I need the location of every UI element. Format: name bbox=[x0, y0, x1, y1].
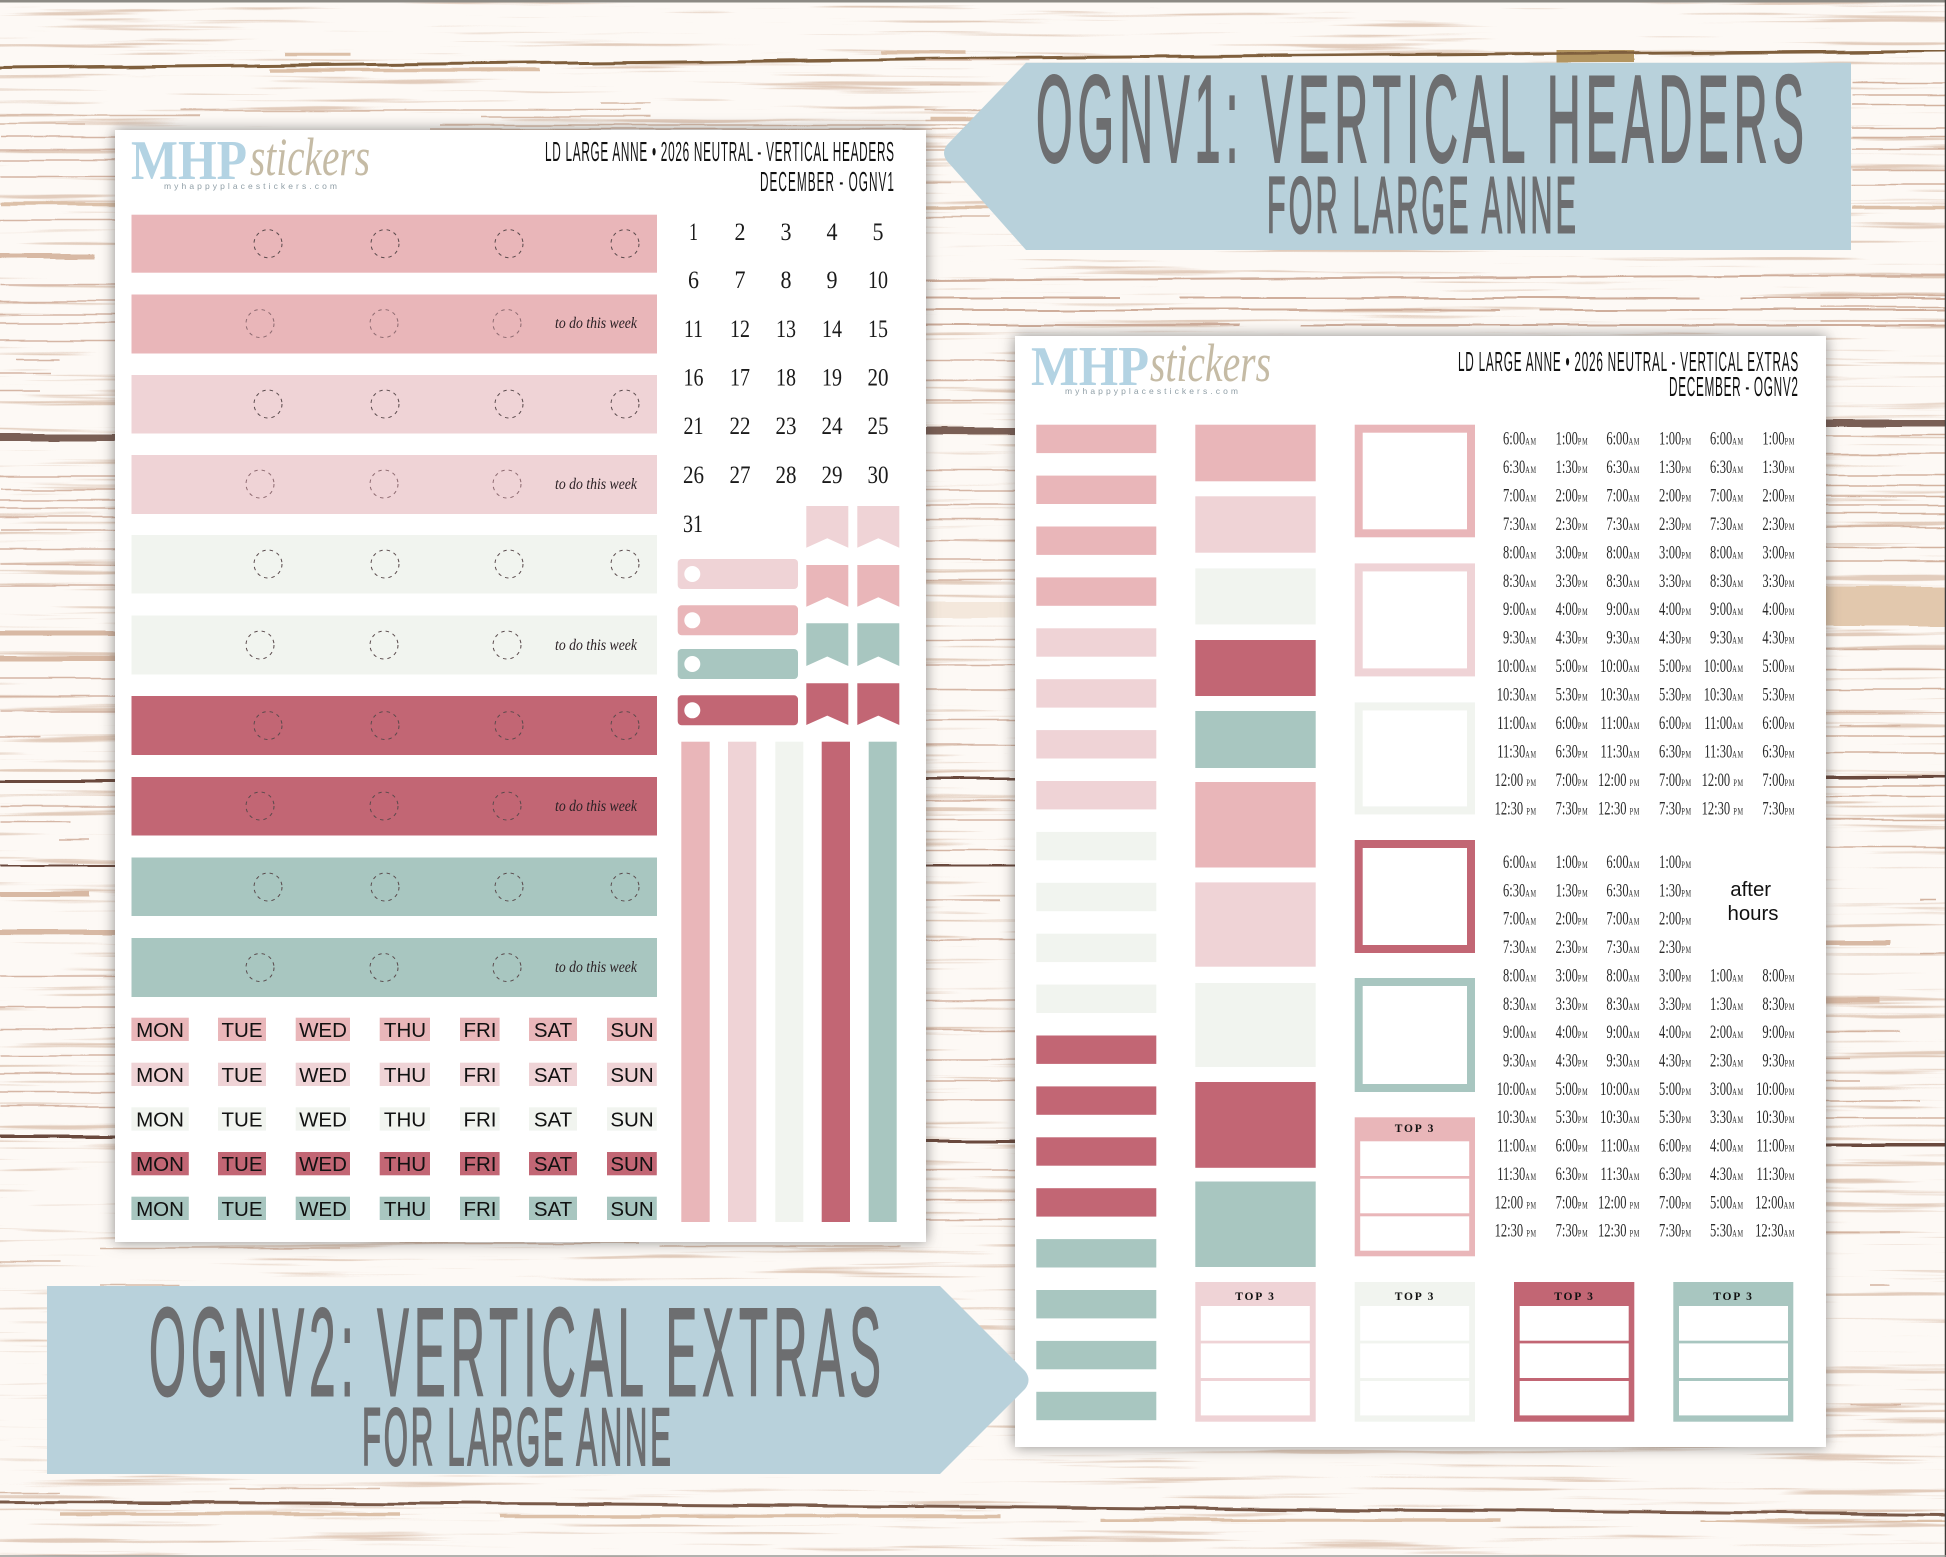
time labels: lower block: 7:30AM bbox=[1503, 938, 1537, 958]
time labels: upper block: 7:30PM bbox=[1556, 799, 1588, 819]
weekly header bars: to do this week bbox=[555, 959, 638, 976]
sheet title bbox=[1458, 346, 1798, 403]
date numbers: 31 bbox=[683, 511, 703, 538]
time labels: lower block: 6:30AM bbox=[1606, 881, 1640, 901]
time labels: lower block: 3:30PM bbox=[1556, 994, 1588, 1015]
time labels: upper block: 6:30PM bbox=[1556, 742, 1588, 762]
time labels: upper block: 5:30PM bbox=[1556, 685, 1588, 705]
time labels: lower block: 4:30PM bbox=[1659, 1051, 1692, 1071]
weekday labels: MON bbox=[136, 1153, 184, 1176]
time labels: lower block: 6:30PM bbox=[1556, 1165, 1588, 1185]
time labels: lower block: 10:00AM bbox=[1497, 1080, 1537, 1100]
time labels: upper block: 3:00PM bbox=[1556, 543, 1588, 563]
time labels: upper block: 1:30PM bbox=[1762, 458, 1795, 478]
weekday labels: THU bbox=[384, 1153, 426, 1176]
bookmark flags bbox=[806, 506, 899, 725]
date numbers: 25 bbox=[868, 413, 888, 440]
weekday labels: TUE bbox=[222, 1198, 262, 1221]
time labels: lower block: 4:00PM bbox=[1659, 1023, 1692, 1043]
time labels: upper block: 5:00PM bbox=[1556, 657, 1588, 677]
sheet title bbox=[545, 136, 894, 198]
sheet title: DECEMBER - OGNV1 bbox=[760, 166, 894, 198]
time labels: lower block: 10:30AM bbox=[1497, 1108, 1537, 1128]
date numbers: 6 bbox=[688, 267, 699, 294]
time labels: lower block: 9:30PM bbox=[1762, 1051, 1795, 1071]
time labels: upper block: 12:30 PM bbox=[1495, 799, 1537, 819]
time labels: upper block: 11:30AM bbox=[1601, 742, 1640, 762]
weekday labels: SUN bbox=[610, 1064, 654, 1087]
time labels: lower block: 11:00AM bbox=[1497, 1136, 1537, 1156]
arrow banner: OGNV1 bbox=[944, 50, 1851, 250]
time labels: upper block: 4:00PM bbox=[1659, 600, 1692, 620]
weekday labels: MON bbox=[136, 1019, 184, 1042]
time labels: upper block: 3:30PM bbox=[1659, 571, 1692, 592]
weekday labels: TUE bbox=[222, 1108, 262, 1132]
date numbers: 8 bbox=[780, 267, 792, 294]
time labels: upper block: 3:30PM bbox=[1762, 571, 1795, 592]
time labels: upper block: 10:00AM bbox=[1497, 657, 1537, 677]
weekly header bars: to do this week bbox=[555, 637, 638, 654]
after hours label bbox=[1727, 879, 1779, 925]
time labels: upper block: 6:30AM bbox=[1503, 458, 1537, 478]
time labels: lower block: 11:30AM bbox=[1601, 1165, 1640, 1185]
time labels: upper block: 9:30AM bbox=[1503, 628, 1537, 648]
time labels: lower block: 10:30AM bbox=[1600, 1108, 1640, 1128]
time labels: lower block: 5:30AM bbox=[1710, 1221, 1744, 1241]
weekday labels: THU bbox=[384, 1198, 426, 1221]
time labels: upper block: 9:30AM bbox=[1606, 628, 1640, 648]
time labels: upper block: 10:30AM bbox=[1600, 685, 1640, 705]
weekly header bars: to do this week bbox=[555, 315, 638, 332]
time labels: upper block: 2:00PM bbox=[1762, 486, 1795, 506]
time labels: upper block: 1:00PM bbox=[1659, 429, 1692, 449]
time labels: lower block: 9:00AM bbox=[1503, 1023, 1537, 1043]
date numbers: 26 bbox=[683, 462, 704, 489]
small horizontal bars bbox=[1036, 425, 1156, 1420]
sheet 2: vertical extras bbox=[1015, 333, 1826, 1447]
weekday labels: SUN bbox=[610, 1019, 654, 1042]
sheet 1: vertical headers bbox=[115, 127, 926, 1242]
weekday labels: WED bbox=[299, 1153, 347, 1176]
logo: stickers bbox=[250, 127, 370, 187]
weekday labels bbox=[131, 1018, 657, 1221]
time labels: upper block: 1:30PM bbox=[1659, 458, 1692, 478]
date numbers: 27 bbox=[730, 462, 750, 489]
date numbers: 17 bbox=[730, 364, 750, 392]
date numbers: 30 bbox=[868, 462, 888, 489]
weekday labels: MON bbox=[136, 1108, 184, 1132]
weekday labels: SUN bbox=[610, 1198, 654, 1221]
time labels: upper block: 11:30AM bbox=[1497, 742, 1537, 762]
date numbers: 21 bbox=[684, 413, 704, 440]
weekday labels: SAT bbox=[534, 1064, 573, 1087]
weekday labels: FRI bbox=[463, 1198, 497, 1221]
sheet title: LD LARGE ANNE • 2026 NEUTRAL - VERTICAL HEADERS bbox=[545, 136, 894, 168]
weekday labels: TUE bbox=[222, 1153, 262, 1176]
time labels: upper block: 6:30PM bbox=[1659, 742, 1692, 762]
time labels: lower block: 1:30PM bbox=[1659, 881, 1692, 901]
time labels: upper block: 11:00AM bbox=[1497, 714, 1537, 734]
time labels: lower block: 2:00PM bbox=[1659, 909, 1692, 929]
time labels: lower block: 5:00PM bbox=[1556, 1080, 1588, 1100]
date numbers: 15 bbox=[868, 316, 888, 343]
time labels: upper block: 7:30AM bbox=[1606, 515, 1640, 535]
time labels: upper block: 5:00PM bbox=[1659, 657, 1692, 677]
after hours label: after bbox=[1730, 879, 1771, 901]
time labels: lower block: 7:00AM bbox=[1503, 909, 1537, 929]
square frames bbox=[1359, 429, 1471, 1088]
top 3 box: teal bbox=[1673, 1282, 1793, 1422]
time labels: upper block: 7:30PM bbox=[1659, 799, 1692, 819]
time labels: upper block: 7:00PM bbox=[1659, 771, 1692, 791]
date numbers: 18 bbox=[776, 364, 796, 392]
time labels: lower block: 10:00AM bbox=[1600, 1080, 1640, 1100]
time labels: lower block: 7:00PM bbox=[1659, 1193, 1692, 1213]
time labels: upper block: 8:30AM bbox=[1710, 571, 1744, 592]
time labels: upper block: 5:00PM bbox=[1762, 657, 1795, 677]
time labels: lower block: 3:00PM bbox=[1556, 966, 1588, 986]
logo: MHP bbox=[131, 130, 247, 192]
time labels: upper block: 6:30AM bbox=[1606, 458, 1640, 478]
time labels: upper block: 3:30PM bbox=[1556, 571, 1588, 592]
time labels: upper block: 9:30AM bbox=[1710, 628, 1744, 648]
time labels: lower block: 5:30PM bbox=[1659, 1108, 1692, 1128]
date numbers: 20 bbox=[868, 364, 888, 392]
time labels: upper block: 7:00AM bbox=[1503, 486, 1537, 506]
weekday labels: WED bbox=[299, 1064, 347, 1087]
time labels: upper block: 10:30AM bbox=[1497, 685, 1537, 705]
time labels: lower block: 3:30AM bbox=[1710, 1108, 1744, 1128]
time labels: lower block: 12:30 PM bbox=[1495, 1221, 1537, 1241]
after hours label: hours bbox=[1727, 903, 1779, 925]
time labels: lower block: 7:00AM bbox=[1606, 909, 1640, 929]
time labels: lower block: 6:00PM bbox=[1659, 1136, 1692, 1156]
top 3 box: rose: TOP 3 bbox=[1554, 1291, 1595, 1303]
weekday labels: THU bbox=[384, 1064, 426, 1087]
time labels: upper block: 1:30PM bbox=[1556, 458, 1588, 478]
time labels: upper block: 1:00PM bbox=[1556, 429, 1588, 449]
time labels: lower block: 8:00PM bbox=[1762, 966, 1795, 986]
time labels: upper block: 8:00AM bbox=[1606, 543, 1640, 563]
time labels: upper block: 7:00PM bbox=[1762, 771, 1795, 791]
time labels: lower block: 1:00PM bbox=[1659, 853, 1692, 873]
top 3 box: teal: TOP 3 bbox=[1713, 1291, 1754, 1303]
date numbers: 4 bbox=[826, 219, 838, 246]
time labels: upper block: 8:00AM bbox=[1503, 543, 1537, 563]
time labels: upper block bbox=[1495, 429, 1795, 819]
date numbers: 13 bbox=[776, 316, 796, 343]
weekly header bars bbox=[132, 215, 657, 997]
time labels: upper block: 9:00AM bbox=[1503, 600, 1537, 620]
top 3 box: off white: TOP 3 bbox=[1395, 1291, 1435, 1303]
time labels: lower block: 12:30 PM bbox=[1598, 1221, 1640, 1241]
time labels: lower block: 11:30AM bbox=[1497, 1165, 1537, 1185]
weekday labels: FRI bbox=[463, 1019, 497, 1042]
sheet title: DECEMBER - OGNV2 bbox=[1669, 371, 1798, 403]
date numbers: 2 bbox=[734, 219, 746, 246]
time labels: upper block: 11:00AM bbox=[1601, 714, 1640, 734]
weekday labels: MON bbox=[136, 1064, 184, 1087]
weekday labels: FRI bbox=[463, 1153, 497, 1176]
time labels: upper block: 3:00PM bbox=[1659, 543, 1692, 563]
arrow banner: OGNV2: OGNV2: VERTICAL EXTRAS bbox=[149, 1283, 881, 1423]
time labels: lower block: 11:30PM bbox=[1757, 1165, 1795, 1185]
arrow banner: OGNV1: FOR LARGE ANNE bbox=[1267, 160, 1576, 250]
date numbers bbox=[683, 219, 888, 538]
time labels: lower block: 6:30AM bbox=[1503, 881, 1537, 901]
time labels: lower block: 1:00AM bbox=[1710, 966, 1744, 986]
time labels: upper block: 12:00 PM bbox=[1702, 771, 1744, 791]
top 3 box: off white bbox=[1355, 1282, 1475, 1422]
top 3 box: light pink bbox=[1195, 1282, 1316, 1422]
date numbers: 9 bbox=[826, 267, 838, 294]
date numbers: 23 bbox=[776, 413, 796, 440]
time labels: lower block: 6:00AM bbox=[1503, 853, 1537, 873]
date numbers: 28 bbox=[776, 462, 796, 489]
time labels: upper block: 4:30PM bbox=[1762, 628, 1795, 648]
logo: MHP bbox=[1031, 336, 1149, 398]
top 3 box: pink bbox=[1355, 1117, 1475, 1256]
date numbers: 5 bbox=[872, 219, 884, 246]
date numbers: 16 bbox=[684, 364, 704, 392]
weekday labels: FRI bbox=[463, 1064, 497, 1087]
time labels: upper block: 2:30PM bbox=[1659, 515, 1692, 535]
time labels: upper block: 7:00PM bbox=[1556, 771, 1588, 791]
time labels: lower block: 2:00AM bbox=[1710, 1023, 1744, 1043]
time labels: lower block: 10:00PM bbox=[1756, 1080, 1795, 1100]
time labels: upper block: 3:00PM bbox=[1762, 543, 1795, 563]
time labels: upper block: 7:30PM bbox=[1762, 799, 1795, 819]
time labels: upper block: 6:30PM bbox=[1762, 742, 1795, 762]
time labels: lower block: 11:00AM bbox=[1601, 1136, 1640, 1156]
time labels: upper block: 8:30AM bbox=[1606, 571, 1640, 592]
date numbers: 14 bbox=[822, 316, 842, 343]
date numbers: 12 bbox=[730, 316, 750, 343]
time labels: lower block: 9:00AM bbox=[1606, 1023, 1640, 1043]
time labels: lower block: 8:30AM bbox=[1503, 994, 1537, 1015]
time labels: lower block: 3:00AM bbox=[1710, 1080, 1744, 1100]
time labels: lower block: 12:00 PM bbox=[1495, 1193, 1537, 1213]
time labels: lower block: 3:00PM bbox=[1659, 966, 1692, 986]
time labels: upper block: 6:00PM bbox=[1556, 714, 1588, 734]
time labels: lower block: 1:30AM bbox=[1710, 994, 1744, 1015]
time labels: upper block: 6:00AM bbox=[1710, 429, 1744, 449]
top 3 box: light pink: TOP 3 bbox=[1235, 1291, 1276, 1303]
weekday labels: MON bbox=[136, 1198, 184, 1221]
time labels: lower block: 4:30PM bbox=[1556, 1051, 1588, 1071]
time labels: lower block: 8:00AM bbox=[1503, 966, 1537, 986]
date numbers: 11 bbox=[684, 316, 703, 343]
time labels: upper block: 6:00PM bbox=[1762, 714, 1795, 734]
weekday labels: SAT bbox=[534, 1019, 573, 1042]
weekly header bars: to do this week bbox=[555, 476, 638, 493]
top 3 box: rose bbox=[1514, 1282, 1634, 1422]
vertical strips bbox=[681, 742, 897, 1222]
time labels: upper block: 11:00AM bbox=[1704, 714, 1744, 734]
time labels: lower block: 1:00PM bbox=[1556, 853, 1588, 873]
time labels: upper block: 8:00AM bbox=[1710, 543, 1744, 563]
time labels: lower block: 12:30AM bbox=[1755, 1221, 1795, 1241]
time labels: upper block: 7:00AM bbox=[1606, 486, 1640, 506]
time labels: lower block: 4:30AM bbox=[1710, 1165, 1744, 1185]
time labels: lower block: 7:00PM bbox=[1556, 1193, 1588, 1213]
logo: myhappyplacestickers.com bbox=[1065, 386, 1238, 396]
time labels: lower block: 2:30PM bbox=[1659, 938, 1692, 958]
weekday labels: WED bbox=[299, 1019, 347, 1042]
date numbers: 24 bbox=[822, 413, 843, 440]
weekday labels: SAT bbox=[534, 1198, 573, 1221]
time labels: upper block: 5:30PM bbox=[1659, 685, 1692, 705]
time labels: upper block: 6:00AM bbox=[1503, 429, 1537, 449]
time labels: upper block: 12:30 PM bbox=[1598, 799, 1640, 819]
weekday labels: WED bbox=[299, 1108, 347, 1132]
time labels: upper block: 7:30AM bbox=[1503, 515, 1537, 535]
time labels: upper block: 7:00AM bbox=[1710, 486, 1744, 506]
time labels: lower block: 10:30PM bbox=[1756, 1108, 1795, 1128]
time labels: lower block: 1:30PM bbox=[1556, 881, 1588, 901]
time labels: lower block: 4:00AM bbox=[1710, 1136, 1744, 1156]
time labels: upper block: 10:30AM bbox=[1704, 685, 1744, 705]
logo bbox=[131, 127, 370, 192]
sheet title: LD LARGE ANNE • 2026 NEUTRAL - VERTICAL EXTRAS bbox=[1458, 346, 1798, 378]
weekday labels: THU bbox=[384, 1019, 426, 1042]
time labels: upper block: 4:30PM bbox=[1556, 628, 1588, 648]
date numbers: 22 bbox=[730, 413, 750, 440]
top 3 box: pink: TOP 3 bbox=[1395, 1123, 1435, 1135]
time labels: upper block: 6:00PM bbox=[1659, 714, 1692, 734]
time labels: lower block: 5:00AM bbox=[1710, 1193, 1744, 1213]
medium and large colour blocks bbox=[1195, 425, 1316, 1267]
time labels: lower block: 5:00PM bbox=[1659, 1080, 1692, 1100]
time labels: lower block: 2:00PM bbox=[1556, 909, 1588, 929]
arrow banner: OGNV2: FOR LARGE ANNE bbox=[362, 1392, 671, 1484]
time labels: upper block: 6:00AM bbox=[1606, 429, 1640, 449]
date numbers: 29 bbox=[822, 462, 842, 489]
weekday labels: THU bbox=[384, 1108, 426, 1132]
time labels: upper block: 10:00AM bbox=[1704, 657, 1744, 677]
time labels: upper block: 6:30AM bbox=[1710, 458, 1744, 478]
logo: stickers bbox=[1150, 333, 1271, 393]
time labels: upper block: 2:00PM bbox=[1659, 486, 1692, 506]
time labels: lower block: 12:00AM bbox=[1755, 1193, 1795, 1213]
weekly header bars: to do this week bbox=[555, 798, 638, 815]
time labels: lower block: 2:30PM bbox=[1556, 938, 1588, 958]
time labels: upper block: 2:30PM bbox=[1556, 515, 1588, 535]
time labels: upper block: 12:00 PM bbox=[1598, 771, 1640, 791]
time labels: lower block: 4:00PM bbox=[1556, 1023, 1588, 1043]
logo bbox=[1031, 333, 1271, 398]
time labels: lower block: 6:00PM bbox=[1556, 1136, 1588, 1156]
time labels: lower block: 9:30AM bbox=[1606, 1051, 1640, 1071]
time labels: upper block: 12:30 PM bbox=[1702, 799, 1744, 819]
arrow banner: OGNV2 bbox=[47, 1283, 1028, 1484]
time labels: lower block bbox=[1495, 853, 1795, 1241]
time labels: upper block: 2:30PM bbox=[1762, 515, 1795, 535]
time labels: upper block: 8:30AM bbox=[1503, 571, 1537, 592]
arrow banner: OGNV1: OGNV1: VERTICAL HEADERS bbox=[1036, 50, 1804, 188]
time labels: lower block: 12:00 PM bbox=[1598, 1193, 1640, 1213]
weekday labels: WED bbox=[299, 1198, 347, 1221]
time labels: upper block: 10:00AM bbox=[1600, 657, 1640, 677]
time labels: lower block: 7:30PM bbox=[1659, 1221, 1692, 1241]
time labels: lower block: 9:00PM bbox=[1762, 1023, 1795, 1043]
time labels: upper block: 11:30AM bbox=[1704, 742, 1744, 762]
time labels: upper block: 7:30AM bbox=[1710, 515, 1744, 535]
time labels: lower block: 7:30PM bbox=[1556, 1221, 1588, 1241]
time labels: lower block: 8:00AM bbox=[1606, 966, 1640, 986]
time labels: lower block: 3:30PM bbox=[1659, 994, 1692, 1015]
time labels: lower block: 2:30AM bbox=[1710, 1051, 1744, 1071]
date numbers: 7 bbox=[734, 267, 746, 294]
time labels: lower block: 5:30PM bbox=[1556, 1108, 1588, 1128]
weekday labels: SAT bbox=[534, 1153, 573, 1176]
date numbers: 10 bbox=[868, 267, 888, 294]
time labels: lower block: 6:00AM bbox=[1606, 853, 1640, 873]
time labels: upper block: 4:00PM bbox=[1762, 600, 1795, 620]
time labels: upper block: 9:00AM bbox=[1606, 600, 1640, 620]
time labels: upper block: 5:30PM bbox=[1762, 685, 1795, 705]
time labels: upper block: 4:00PM bbox=[1556, 600, 1588, 620]
date numbers: 3 bbox=[780, 219, 792, 246]
time labels: upper block: 1:00PM bbox=[1762, 429, 1795, 449]
weekday labels: SUN bbox=[610, 1153, 654, 1176]
time labels: upper block: 12:00 PM bbox=[1495, 771, 1537, 791]
time labels: upper block: 9:00AM bbox=[1710, 600, 1744, 620]
weekday labels: FRI bbox=[463, 1108, 497, 1132]
weekday labels: TUE bbox=[222, 1019, 262, 1042]
date numbers: 19 bbox=[822, 364, 842, 392]
time labels: lower block: 8:30AM bbox=[1606, 994, 1640, 1015]
time labels: lower block: 9:30AM bbox=[1503, 1051, 1537, 1071]
weekday labels: TUE bbox=[222, 1064, 262, 1087]
tab stickers bbox=[678, 559, 798, 725]
time labels: lower block: 7:30AM bbox=[1606, 938, 1640, 958]
time labels: upper block: 4:30PM bbox=[1659, 628, 1692, 648]
weekday labels: SAT bbox=[534, 1108, 573, 1132]
time labels: upper block: 2:00PM bbox=[1556, 486, 1588, 506]
date numbers: 1 bbox=[689, 219, 698, 246]
logo: myhappyplacestickers.com bbox=[164, 181, 337, 191]
time labels: lower block: 8:30PM bbox=[1762, 994, 1795, 1015]
time labels: lower block: 11:00PM bbox=[1757, 1136, 1795, 1156]
time labels: lower block: 6:30PM bbox=[1659, 1165, 1692, 1185]
weekday labels: SUN bbox=[610, 1108, 654, 1132]
